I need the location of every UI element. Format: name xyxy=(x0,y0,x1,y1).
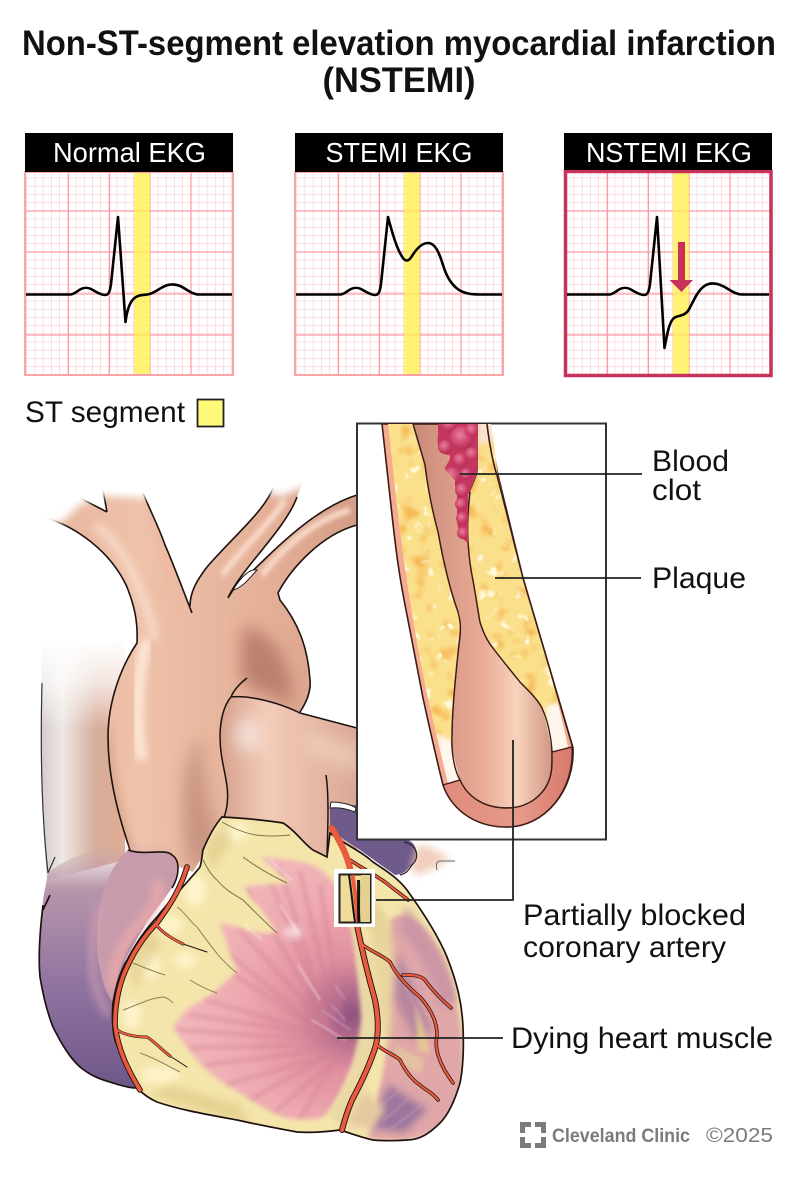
logo: Cleveland Clinic xyxy=(520,1122,773,1148)
fade at vessel tops xyxy=(15,470,178,530)
plaque xyxy=(388,424,568,783)
title xyxy=(22,24,776,100)
right atrium vessel xyxy=(30,610,145,880)
title: (NSTEMI) xyxy=(322,61,476,100)
label: Plaque: Plaque xyxy=(652,562,746,595)
icon: Cleveland Clinic cross xyxy=(520,1122,546,1148)
partial blockage highlight box xyxy=(336,872,372,924)
pulmonary artery xyxy=(219,678,357,856)
yellow lumps xyxy=(123,823,249,1083)
label: Blood clot: Blood xyxy=(652,445,729,478)
blood clot xyxy=(437,416,479,543)
label: Blood clot xyxy=(652,445,729,507)
artery wall xyxy=(382,424,573,827)
arrow: ST depression xyxy=(670,242,693,292)
logo: Cleveland Clinic: Cleveland Clinic xyxy=(552,1126,690,1147)
panel: STEMI EKG: STEMI EKG xyxy=(326,137,472,168)
right side mauve region xyxy=(368,915,463,1141)
purple atrium right xyxy=(330,802,455,875)
panel: Normal EKG xyxy=(25,133,233,375)
coronary arteries xyxy=(115,828,453,1130)
label: Partially blocked coronary artery xyxy=(523,899,746,964)
illustration: heart xyxy=(38,482,464,1142)
beige band beside LAD xyxy=(332,927,374,1122)
panel: NSTEMI EKG xyxy=(564,133,772,376)
legend: ST segment: ST segment xyxy=(25,396,186,429)
end cap bands xyxy=(443,747,572,827)
lumen xyxy=(413,424,552,808)
aorta xyxy=(48,482,356,872)
label: Dying heart muscle: Dying heart muscle xyxy=(511,1022,773,1055)
panel: Normal EKG: Normal EKG xyxy=(53,137,206,168)
panel: STEMI EKG xyxy=(295,133,503,375)
label: Partially blocked coronary artery: coronary artery xyxy=(523,931,726,964)
leader lines xyxy=(337,474,642,1038)
heart ventricle xyxy=(112,816,464,1142)
auricle xyxy=(97,850,178,1003)
label: Partially blocked coronary artery: Partially blocked xyxy=(523,899,746,932)
label: Blood clot: clot xyxy=(652,474,701,507)
yellow folds xyxy=(123,822,290,1072)
logo: Cleveland Clinic: ©2025 xyxy=(706,1125,773,1147)
panel: NSTEMI EKG: NSTEMI EKG xyxy=(586,137,752,168)
pink muscle area xyxy=(172,856,364,1122)
striations xyxy=(178,860,340,1118)
right heart purple chamber xyxy=(39,840,178,1088)
inset: artery cross-section xyxy=(357,416,606,840)
lumen redraw edge xyxy=(413,424,552,780)
